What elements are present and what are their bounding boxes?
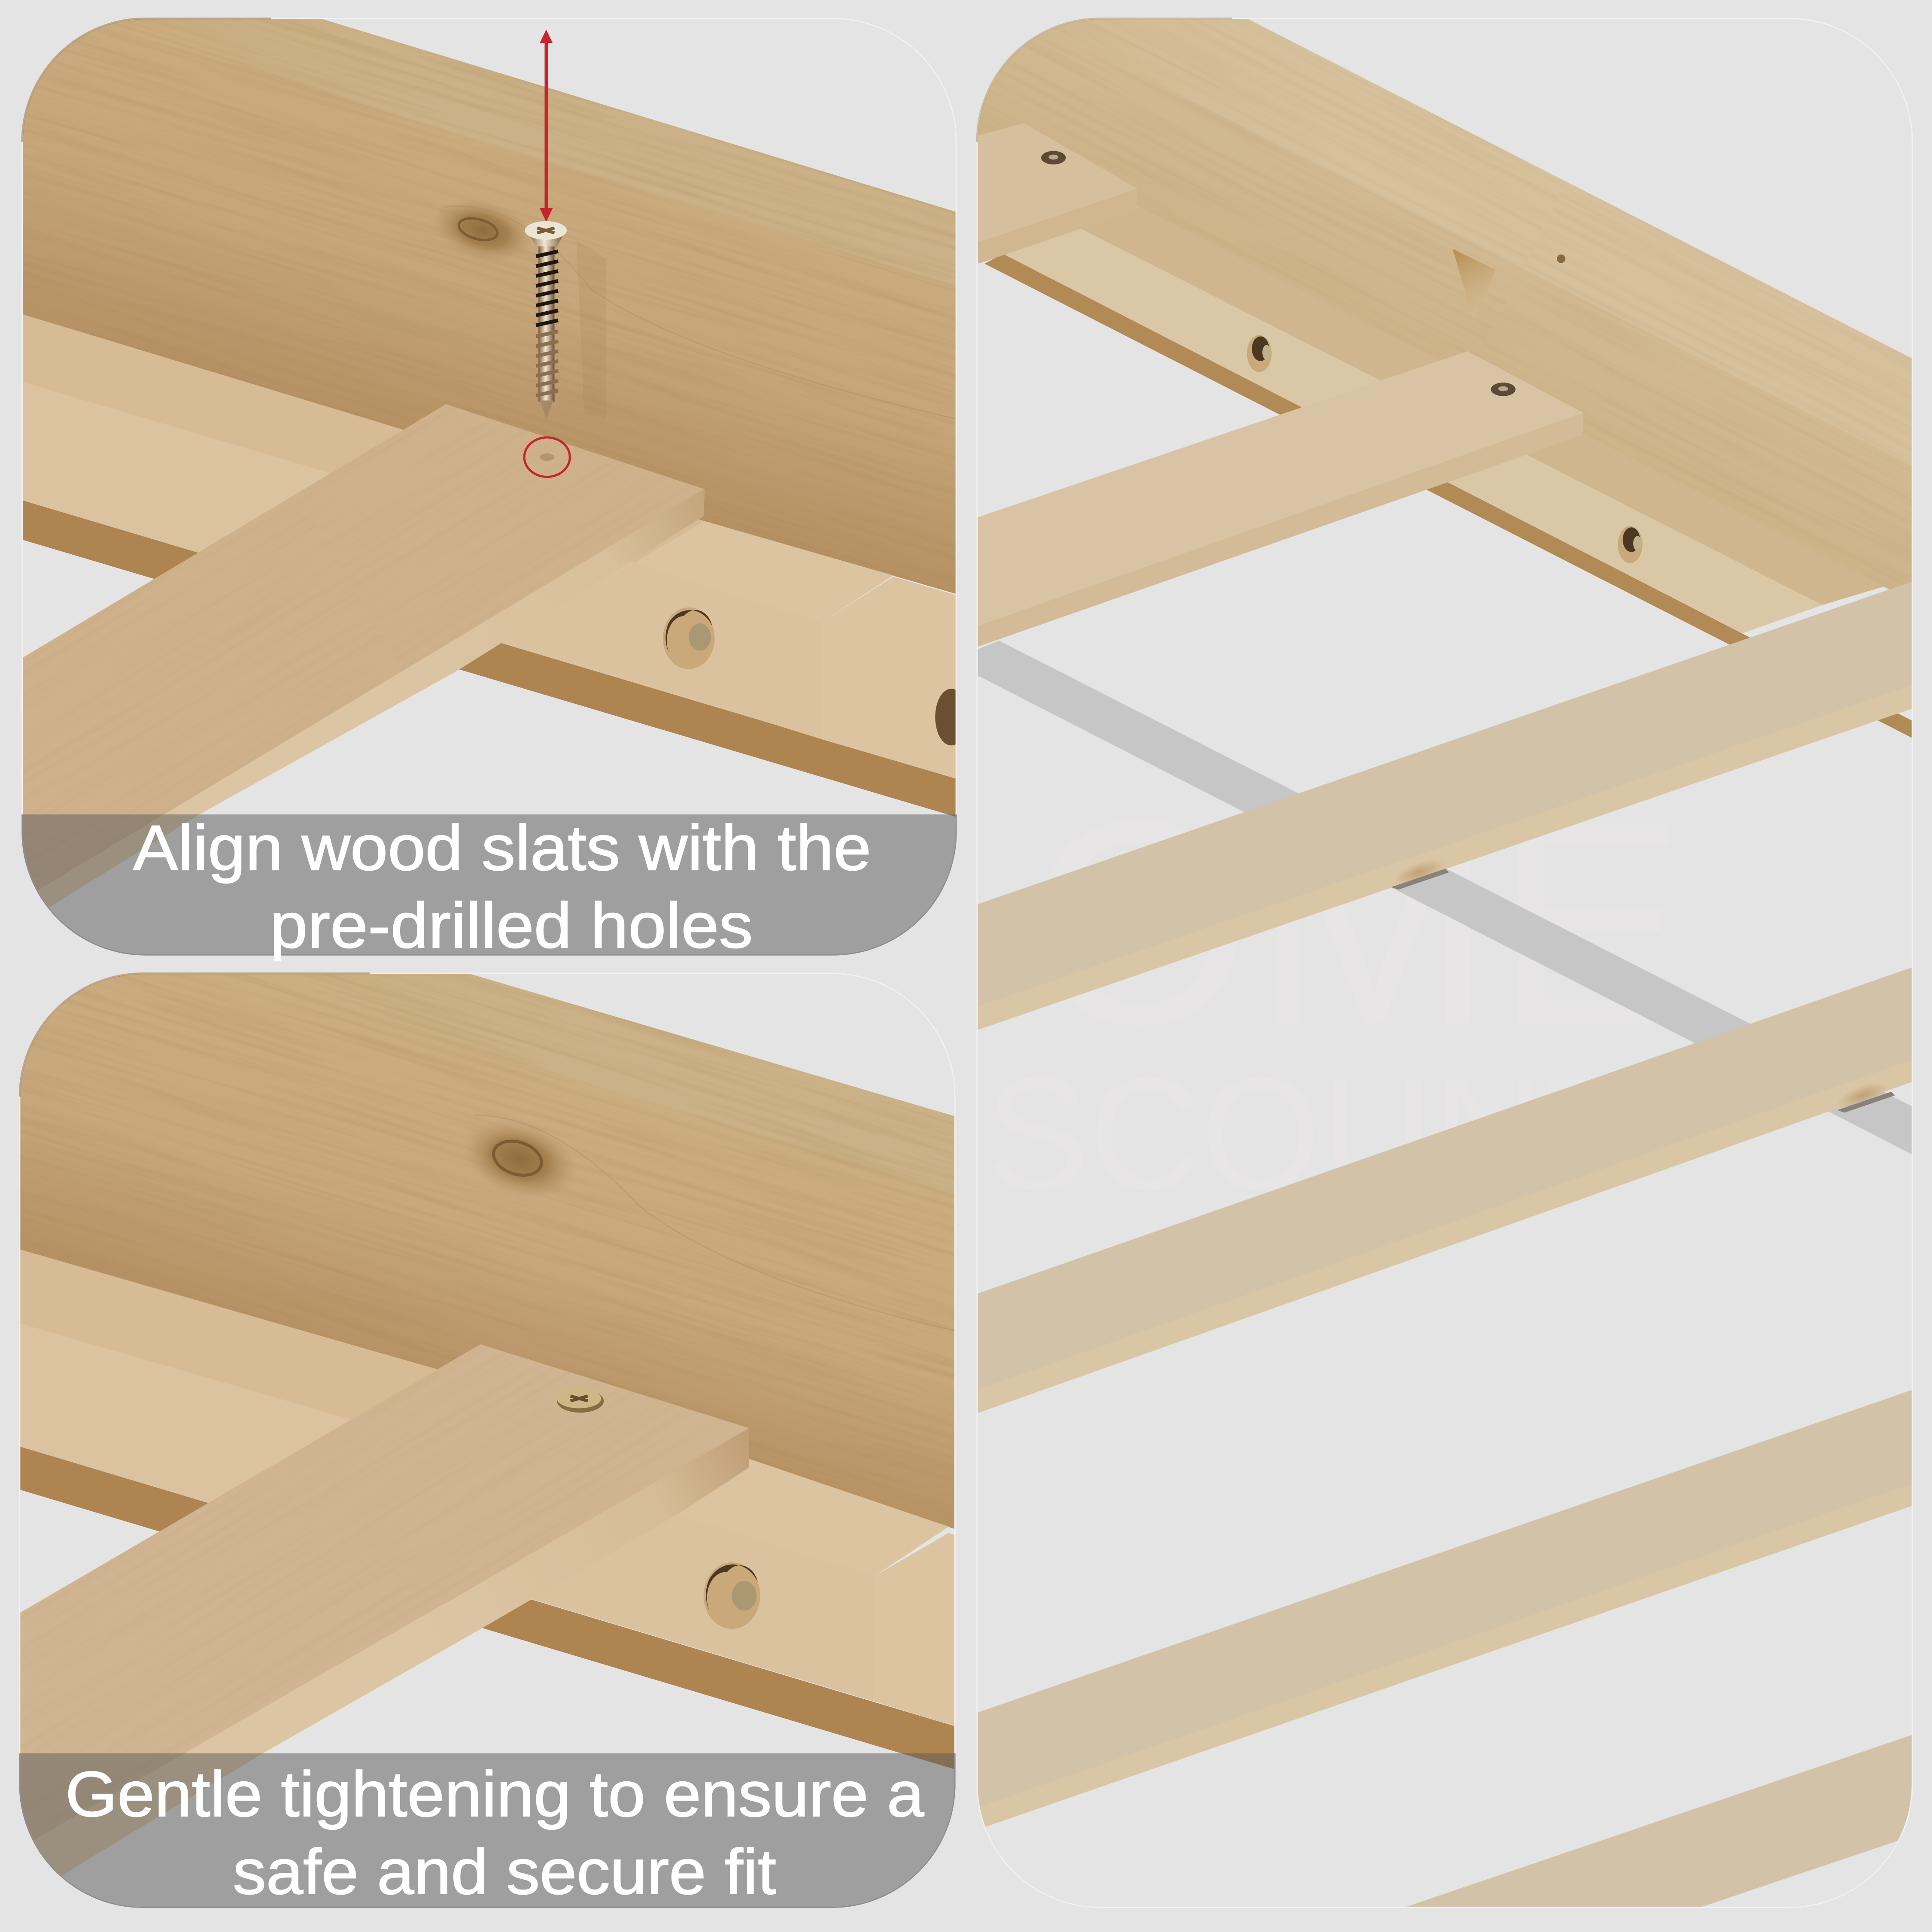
slat one (977, 351, 1583, 647)
caption band (22, 814, 956, 955)
caption one: Align wood slats with the (133, 812, 871, 884)
rail lower strip (984, 254, 1912, 738)
beam top face (123, 18, 956, 286)
side rail front face (1003, 228, 1823, 633)
panel rim three (977, 18, 1232, 142)
installed screw (557, 1388, 604, 1413)
screw (525, 221, 567, 419)
slat short top (977, 123, 1137, 264)
lower dark strip (22, 500, 956, 817)
main beam top face (1060, 18, 1912, 466)
caption two: safe and secure fit (233, 1836, 776, 1908)
metal support bar (977, 641, 1912, 1154)
beam grain two (20, 973, 955, 1529)
beam knot three (1453, 249, 1565, 322)
rail top face left (22, 314, 705, 563)
rail hole left (1247, 335, 1272, 372)
main beam side face (977, 18, 1912, 601)
rail front left (22, 382, 822, 739)
panel: gentle tightening (20, 973, 955, 1908)
panel outline (22, 18, 956, 955)
red arrow (540, 30, 553, 222)
caption two: Gentle tightening to ensure a (65, 1758, 924, 1830)
hole in block one (663, 608, 715, 669)
panel rim one (22, 18, 956, 955)
rail top left two (20, 1249, 749, 1514)
panel rim two (20, 973, 955, 1908)
caption one: pre-drilled holes (270, 890, 753, 961)
hole in block three (704, 1562, 760, 1629)
caption two (65, 1758, 924, 1908)
caption band two (20, 1753, 955, 1908)
main beam grain (977, 18, 1912, 601)
side rail top face (1079, 207, 1884, 605)
beam knot (425, 188, 956, 419)
slat two (977, 582, 1912, 1030)
hole in block two (935, 689, 967, 745)
caption one (133, 812, 871, 961)
panel outline three (977, 18, 1912, 1908)
beam side face (22, 18, 956, 594)
slat three (977, 967, 1912, 1413)
panel outline two (20, 973, 955, 1908)
faint watermark: SCOUNT (986, 1044, 1639, 1223)
beam wood grain (22, 18, 956, 594)
beam top face two (246, 973, 955, 1194)
rail block three (530, 1459, 949, 1701)
faint watermark (986, 760, 1687, 1223)
lower strip two (20, 1446, 955, 1769)
screw shadow (577, 240, 606, 419)
rail block two (822, 577, 967, 779)
faint watermark: OME (1027, 760, 1687, 1084)
pre-drilled hole highlight (524, 437, 570, 477)
slat five (1405, 1735, 1912, 1908)
beam side face two (20, 973, 955, 1529)
wood slat (22, 404, 705, 924)
slat four (977, 1390, 1912, 1830)
rail block four (875, 1533, 955, 1726)
wood slat two (20, 1344, 749, 1904)
panel: align wood slats (22, 18, 967, 955)
panel: overall slat layout (977, 18, 1912, 1908)
rail front left two (20, 1323, 875, 1701)
rail hole right (1618, 526, 1643, 563)
rail block one (505, 521, 893, 739)
beam knot two (452, 1106, 955, 1331)
